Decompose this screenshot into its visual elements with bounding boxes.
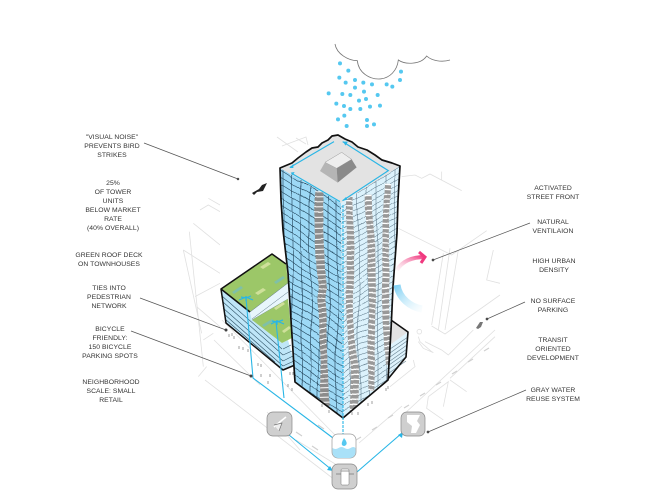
label: below market rate: 25% [106, 180, 120, 187]
roof water collection arrows [289, 142, 388, 202]
label: visual noise: STRIKES [97, 152, 127, 159]
label: no surface parking: NO SURFACE [531, 298, 575, 305]
tower left facade [280, 168, 343, 417]
townhouse walls [221, 289, 295, 370]
label: green roof deck: GREEN ROOF DECK [75, 252, 143, 259]
label: street front: ACTIVATED [534, 185, 572, 192]
label: gray water [526, 387, 580, 403]
ventilation blue swoosh [397, 285, 422, 309]
roof mechanical penthouse [320, 152, 357, 183]
axonometric building diagram [130, 44, 530, 490]
label: below market rate: (40% OVERALL) [87, 225, 139, 232]
label: bicycle friendly [82, 326, 138, 360]
label: pedestrian network: PEDESTRIAN [87, 294, 131, 301]
label: visual noise: PREVENTS BIRD [84, 143, 140, 150]
label: neighborhood scale: RETAIL [99, 397, 123, 404]
label: visual noise: "VISUAL NOISE" [86, 134, 138, 141]
icon: toilet [401, 412, 425, 436]
label: pedestrian network [87, 285, 131, 310]
label: pedestrian network: NETWORK [91, 303, 127, 310]
tower right facade [341, 166, 400, 417]
icon: filter tank [332, 464, 357, 489]
icon: shower [267, 412, 292, 436]
label: below market rate [85, 180, 141, 232]
label: bicycle friendly: BICYCLE [95, 326, 125, 333]
label: transit oriented: DEVELOPMENT [527, 355, 579, 362]
label: transit oriented: ORIENTED [535, 346, 571, 353]
label: natural ventilation [532, 219, 573, 235]
label: street front: STREET FRONT [527, 194, 579, 201]
rooftop trees [239, 296, 284, 325]
label: gray water: REUSE SYSTEM [526, 396, 580, 403]
right podium [388, 320, 408, 379]
label: below market rate: UNITS [103, 198, 123, 205]
bird [252, 183, 267, 195]
label: neighborhood scale: SCALE: SMALL [87, 388, 135, 395]
label: gray water: GRAY WATER [531, 387, 575, 394]
label: urban density: HIGH URBAN [532, 258, 576, 265]
upper green roof [221, 254, 288, 312]
ventilation pink arrow [397, 252, 425, 270]
label: neighborhood scale [82, 379, 140, 404]
label: visual noise [84, 134, 140, 159]
teal planters [232, 276, 285, 327]
label: natural ventilation: NATURAL [537, 219, 569, 226]
label: below market rate: OF TOWER [95, 189, 131, 196]
label: urban density [532, 258, 576, 274]
label: bicycle friendly: 150 BICYCLE [89, 344, 131, 351]
townhouse floor lines [222, 296, 294, 366]
label: street front [527, 185, 580, 201]
gap band lines [250, 283, 288, 320]
label: natural ventilation: VENTILAION [533, 228, 573, 235]
label: green roof deck: ON TOWNHOUSES [78, 261, 140, 268]
icon: water cistern [332, 434, 356, 458]
townhouse outline [221, 254, 295, 370]
label: neighborhood scale: NEIGHBORHOOD [82, 379, 140, 386]
lower green roof [252, 299, 292, 343]
roof planters [255, 262, 291, 333]
label: pedestrian network: TIES INTO [92, 285, 126, 292]
parked car [476, 322, 483, 329]
label: bicycle friendly: FRIENDLY: [92, 335, 128, 342]
callout leaders [131, 143, 530, 433]
townhouses [221, 254, 295, 370]
rain drops [327, 61, 403, 128]
label: no surface parking [531, 298, 575, 314]
label: below market rate: RATE [104, 216, 122, 223]
label: transit oriented [527, 337, 579, 362]
pedestrians [229, 333, 388, 415]
site context linework [183, 137, 500, 480]
tower roof [280, 135, 400, 203]
tower outline [280, 135, 400, 418]
label: bicycle friendly: PARKING SPOTS [82, 353, 138, 360]
label: green roof deck [75, 252, 143, 268]
label: transit oriented: TRANSIT [538, 337, 568, 344]
label: no surface parking: PARKING [538, 307, 568, 314]
rain cloud [335, 44, 450, 79]
roof gap [250, 283, 288, 320]
gray water piping [246, 205, 403, 472]
label: urban density: DENSITY [539, 267, 569, 274]
label: below market rate: BELOW MARKET [85, 207, 141, 214]
